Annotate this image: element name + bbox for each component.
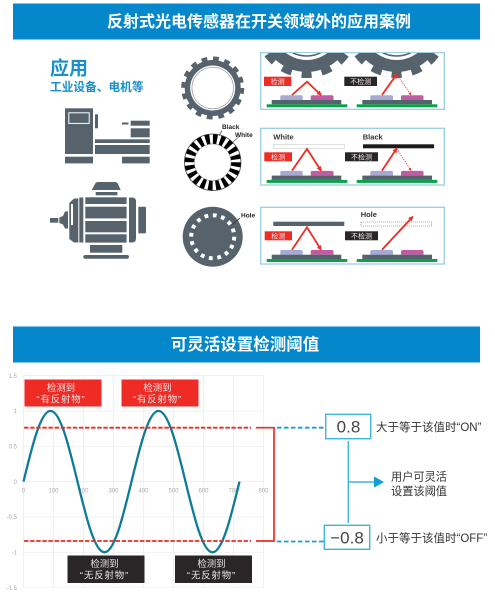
header: adjustable threshold: 可灵活设置检测阈值	[171, 334, 319, 354]
y axis labels: 1	[14, 409, 18, 415]
icon: black and white encoder disc: Black	[222, 124, 240, 131]
tag: detected	[264, 152, 292, 162]
heading: applications: 应用	[50, 56, 88, 80]
header: adjustable threshold	[13, 326, 480, 362]
tag: not detected: 不检测	[351, 152, 372, 162]
panel: hole detection	[261, 207, 444, 264]
arrow: user adjustable	[348, 441, 384, 523]
tag: detected	[265, 231, 292, 240]
x axis labels: 800	[258, 488, 269, 494]
connector: lower threshold dashes	[277, 540, 324, 542]
x axis labels: 700	[228, 488, 239, 494]
y axis labels: -1.5	[7, 586, 18, 592]
label: reflector detected 1: “有反射物”	[36, 394, 86, 404]
light paths	[292, 148, 411, 171]
tag: not detected	[344, 77, 377, 86]
label: no reflector 1: “无反射物”	[80, 570, 129, 580]
x axis labels: 300	[108, 488, 119, 494]
label: no reflector 1	[68, 556, 144, 583]
icon: black and white encoder disc	[184, 124, 253, 190]
light paths	[292, 217, 413, 250]
x axis labels: 200	[78, 488, 89, 494]
x axis labels: 100	[48, 488, 59, 494]
white and black targets	[273, 132, 434, 148]
text: user can set threshold: 设置该阈值	[391, 484, 447, 498]
y axis labels: 0.5	[9, 444, 18, 450]
tag: detected: 检测	[271, 232, 285, 240]
x axis labels: 600	[198, 488, 209, 494]
label: no reflector 2	[175, 556, 252, 583]
text: user can set threshold: 用户可灵活	[391, 470, 447, 484]
label: reflector detected 1	[24, 380, 102, 406]
solid and hole targets	[273, 210, 432, 226]
threshold dashed lines	[24, 428, 251, 541]
chart: sine wave with thresholds	[7, 374, 269, 592]
y axis labels	[7, 374, 18, 592]
tag: detected: 检测	[271, 77, 285, 86]
sine curve	[24, 411, 240, 552]
header: application cases	[13, 4, 480, 40]
label: reflector detected 2	[122, 380, 198, 406]
icon: black and white encoder disc: White	[235, 132, 253, 139]
sensors	[267, 171, 437, 183]
gear sections	[264, 53, 439, 78]
y axis labels: 0	[14, 480, 18, 486]
icon: lathe machine	[65, 108, 150, 163]
value box: 0.8: 0.8	[337, 418, 360, 436]
value box: -0.8	[324, 525, 370, 549]
sensors	[267, 95, 437, 107]
tag: not detected	[345, 231, 378, 240]
label: no reflector 2: 检测到	[197, 558, 226, 569]
icon: disc with holes	[183, 207, 255, 267]
icon: disc with holes: Hole	[241, 212, 255, 220]
y axis labels: -0.5	[7, 515, 18, 521]
y axis labels: -1	[12, 550, 18, 556]
connector: upper threshold dashes	[277, 427, 325, 429]
x axis labels: 0	[22, 488, 26, 494]
solid and hole targets: Hole	[361, 210, 377, 219]
bracket: threshold range	[256, 428, 274, 541]
sensors	[267, 250, 437, 262]
tag: not detected: 不检测	[351, 232, 372, 240]
label: reflector detected 2: 检测到	[143, 382, 172, 393]
heading: applications: 工业设备、电机等	[50, 80, 144, 94]
panel: gear detection	[260, 52, 445, 110]
label: reflector detected 2: “有反射物”	[133, 394, 182, 404]
y axis labels: 1.5	[9, 374, 18, 380]
x axis labels	[22, 488, 269, 494]
label: no reflector 1: 检测到	[90, 558, 119, 569]
text: on condition: 大于等于该值时“ON”	[376, 420, 482, 434]
icon: gear	[184, 60, 241, 116]
header: application cases: 反射式光电传感器在开关领域外的应用案例	[107, 12, 411, 31]
x axis labels: 400	[138, 488, 149, 494]
value box: -0.8: −0.8	[330, 528, 364, 548]
tag: not detected: 不检测	[350, 77, 371, 86]
white and black targets: Black	[363, 132, 384, 142]
heading: applications	[50, 56, 144, 94]
panel: black and white detection	[261, 128, 444, 185]
tag: detected: 检测	[271, 152, 285, 162]
light paths	[292, 74, 411, 95]
x axis labels: 500	[168, 488, 179, 494]
label: no reflector 2: “无反射物”	[187, 570, 236, 580]
white and black targets: White	[273, 132, 294, 142]
text: user can set threshold	[391, 470, 447, 498]
tag: detected	[264, 77, 291, 86]
tag: not detected	[345, 152, 378, 162]
icon: electric motor	[50, 182, 146, 259]
label: reflector detected 1: 检测到	[47, 382, 75, 393]
text: off condition: 小于等于该值时“OFF”	[376, 531, 487, 545]
value box: 0.8	[326, 414, 371, 439]
